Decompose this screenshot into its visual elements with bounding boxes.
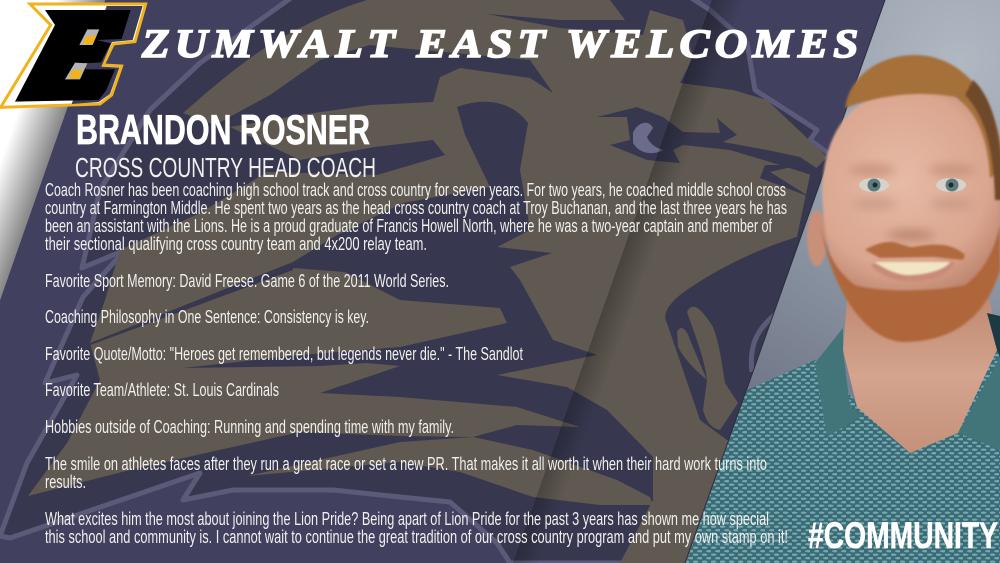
lion dark brow and eye [598, 107, 816, 174]
lion dark sliver [88, 262, 293, 346]
biography text block: Favorite Sport Memory: David Freese. Game 6 of the 2011 World Series. [45, 270, 449, 291]
biography text block: Coaching Philosophy in One Sentence: Consistency is key. [45, 306, 369, 327]
logo notches [79, 29, 99, 45]
coach role: CROSS COUNTRY HEAD COACH [75, 152, 376, 183]
panel fold shading [513, 0, 735, 563]
person photo [686, 55, 1000, 563]
face [822, 88, 1000, 342]
smile [870, 262, 955, 281]
title: ZUMWALT EAST WELCOMES [141, 22, 858, 66]
lion tan: mane and head [28, 0, 827, 563]
photo background [600, 0, 1000, 563]
biography text block: Favorite Quote/Motto: "Heroes get remembered, but legends never die." - The Sandlot [45, 343, 523, 364]
biography text block [45, 179, 788, 547]
hair [845, 55, 1000, 178]
white left margin with shadow [0, 0, 105, 300]
biography text block: Hobbies outside of Coaching: Running and spending time with my family. [45, 416, 454, 437]
lion tan: lower band [247, 437, 653, 505]
shirt [686, 340, 1000, 563]
lion eye highlight [633, 123, 663, 153]
collar shadow [987, 313, 1000, 357]
biography text block: results. [45, 471, 86, 492]
ear [807, 210, 827, 266]
coach name: BRANDON ROSNER [76, 106, 370, 153]
hair shadow on the right [965, 80, 1000, 200]
mustache [865, 242, 965, 260]
beard [820, 225, 1000, 342]
lion second stripe [760, 165, 806, 196]
lion top stripes [487, 0, 690, 35]
neck [843, 300, 997, 453]
panel edge [685, 0, 885, 563]
eyes [859, 178, 966, 192]
biography text block: their sectional qualifying cross country team and 4x200 relay team. [45, 233, 427, 254]
lion outline at lower right [751, 312, 778, 372]
lion muzzle tan marks [677, 307, 738, 430]
biography text block: Favorite Team/Athlete: St. Louis Cardinals [45, 379, 279, 400]
cheek and brow shading [848, 165, 976, 240]
logo: Zumwalt East E [1, 4, 146, 107]
shirt collar [815, 328, 1000, 450]
